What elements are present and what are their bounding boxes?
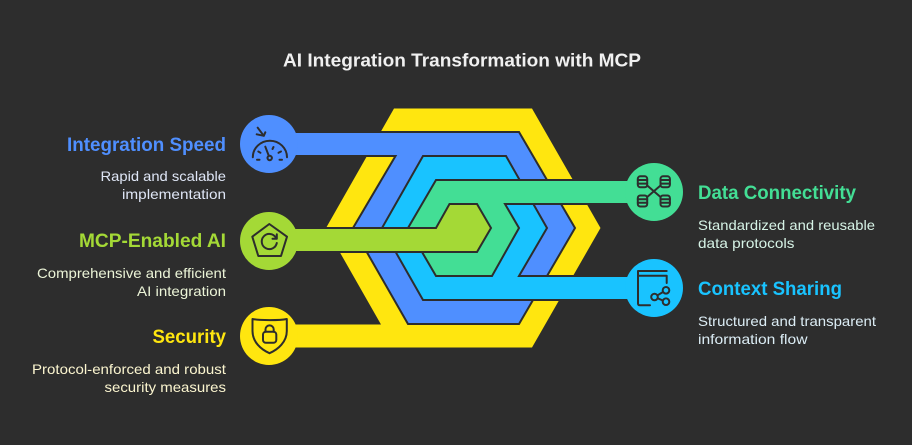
text: MCP-enabled AI: AI integration xyxy=(137,283,226,299)
text: MCP-enabled AI: Comprehensive and efficient xyxy=(37,265,226,281)
text: security: Security xyxy=(152,326,226,348)
text: security xyxy=(32,326,226,395)
band: data connectivity (green) xyxy=(408,163,683,276)
text: MCP-enabled AI xyxy=(37,230,226,299)
text: context sharing: information flow xyxy=(698,331,808,347)
band: MCP-enabled AI (lime) xyxy=(240,204,491,270)
text: data connectivity: Standardized and reusable xyxy=(698,217,875,233)
text: context sharing: Structured and transparent xyxy=(698,313,876,329)
text: data connectivity: Data Connectivity xyxy=(698,182,856,204)
text: data connectivity: data protocols xyxy=(698,235,794,251)
icon: connected databases xyxy=(638,176,670,206)
band: security (yellow) xyxy=(240,108,600,365)
text: integration speed: Integration Speed xyxy=(67,134,226,156)
icon: speed gauge xyxy=(253,128,287,160)
band: integration speed (blue) xyxy=(240,115,575,324)
text: context sharing: Context Sharing xyxy=(698,278,842,300)
text: context sharing xyxy=(698,278,876,347)
text: security: Protocol-enforced and robust xyxy=(32,361,226,377)
text: security: security measures xyxy=(104,379,226,395)
icon: shield with lock xyxy=(252,319,287,353)
icon: pentagon with refresh arrow xyxy=(252,224,287,256)
text: integration speed: Rapid and scalable xyxy=(100,168,226,184)
title: AI Integration Transformation with MCP xyxy=(283,50,641,70)
text: integration speed: implementation xyxy=(122,186,226,202)
text: data connectivity xyxy=(698,182,875,251)
text: MCP-enabled AI: MCP-Enabled AI xyxy=(79,230,226,252)
text: integration speed xyxy=(67,134,226,202)
icon: book with share nodes xyxy=(638,271,669,305)
band: context sharing (cyan) xyxy=(382,156,683,317)
